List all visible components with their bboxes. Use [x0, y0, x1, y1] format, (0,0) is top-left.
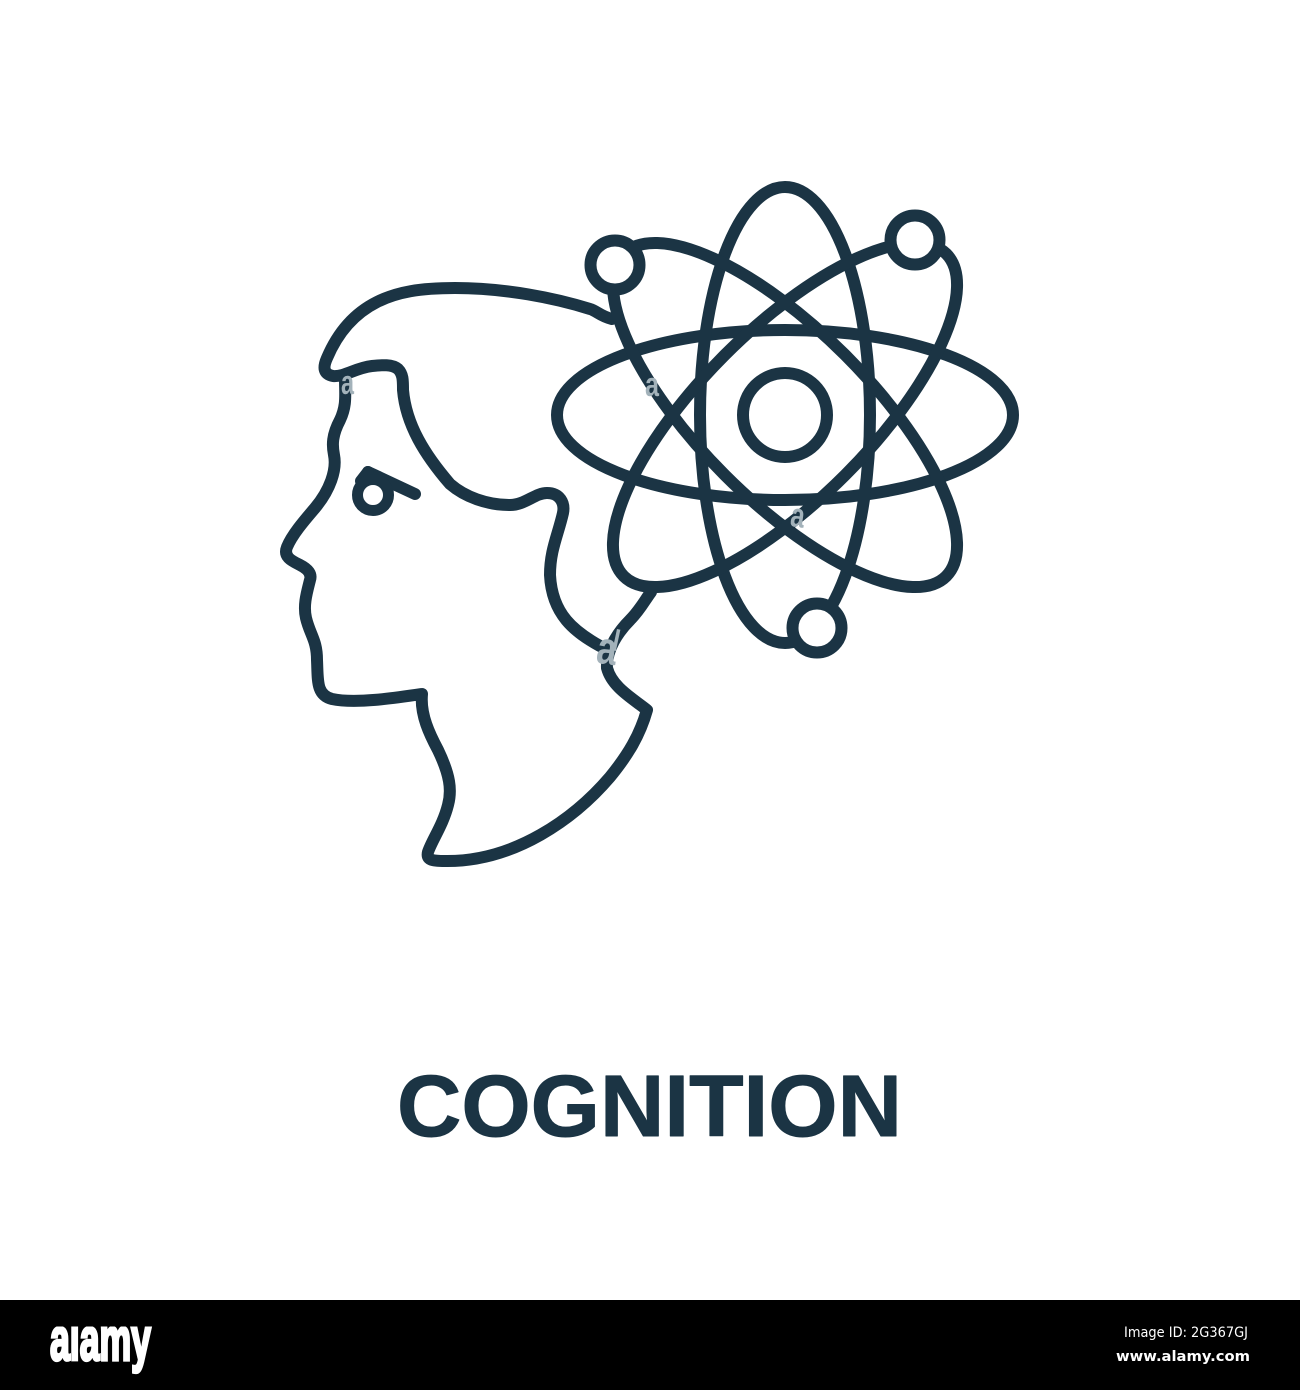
footer: website: www.alamy.com — [1116, 1349, 1250, 1365]
icon: hair outline — [325, 288, 612, 646]
footer: alamy logo: alamy — [50, 1306, 151, 1373]
watermark marks: a — [341, 364, 355, 402]
atom: electron top right — [890, 216, 940, 264]
watermark marks: l — [609, 624, 623, 658]
footer bar — [0, 1300, 1300, 1390]
atom: diagonal orbit, top-left to bottom-right — [564, 194, 1006, 636]
watermark marks — [341, 364, 808, 675]
watermark marks: a — [645, 366, 660, 404]
atom: vertical orbit — [700, 187, 870, 643]
icon: face and neck outline — [286, 379, 651, 861]
icon: eye and brow — [358, 472, 415, 510]
icon: atom — [557, 187, 1013, 652]
footer: image id: Image ID: 2G367GJ — [1124, 1325, 1248, 1341]
atom: electron top left — [590, 240, 640, 290]
watermark marks: a — [788, 496, 808, 536]
title: COGNITION — [397, 1058, 902, 1155]
icon: head in profile with atom — [286, 187, 1013, 861]
watermark marks: a — [594, 621, 621, 675]
atom: electron bottom — [792, 604, 842, 652]
atom: horizontal orbit — [557, 330, 1013, 500]
atom: diagonal orbit, bottom-left to top-right — [564, 194, 1006, 636]
atom: nucleus — [743, 373, 827, 457]
